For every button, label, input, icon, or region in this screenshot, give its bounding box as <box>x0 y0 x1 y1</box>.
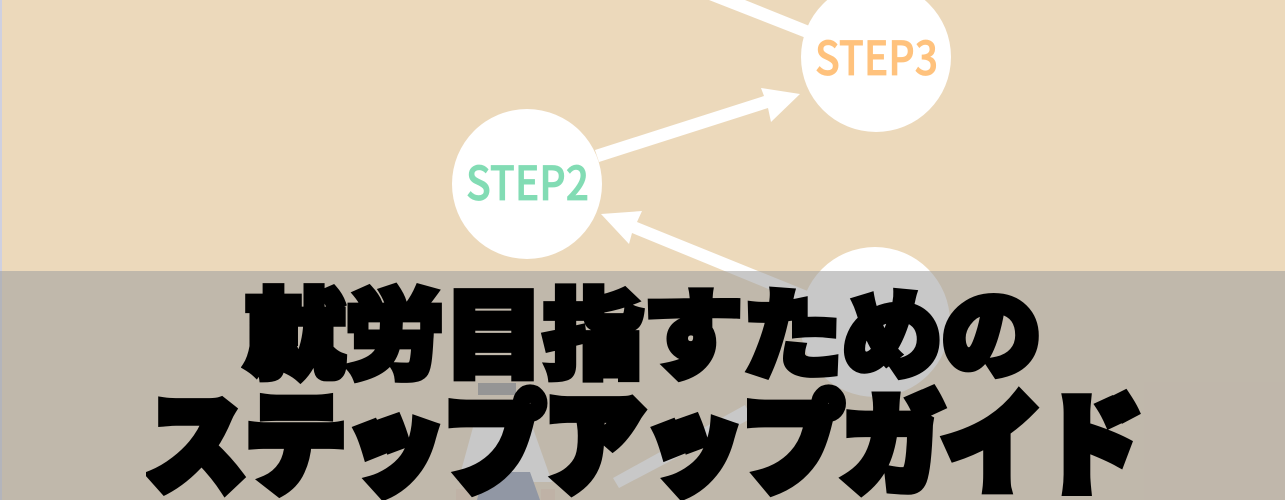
arrow: step 2 to step 3 <box>595 88 800 162</box>
step 3 circle <box>801 0 951 132</box>
arrow: lower diagonal <box>613 405 752 488</box>
step 2 circle <box>452 109 602 259</box>
title line 1: 就労目指すための <box>245 258 1041 398</box>
person illustration <box>456 383 555 500</box>
dim overlay band <box>0 271 1285 500</box>
arrow: step 1 to step 2 <box>601 211 815 306</box>
accent: light blue detail <box>815 304 850 328</box>
step 1 circle <box>800 247 950 397</box>
step 3 circle: STEP3 <box>815 20 938 89</box>
step 2 circle: STEP2 <box>466 145 589 214</box>
title <box>146 258 1141 500</box>
arrow: into step 3 from top <box>709 0 812 38</box>
